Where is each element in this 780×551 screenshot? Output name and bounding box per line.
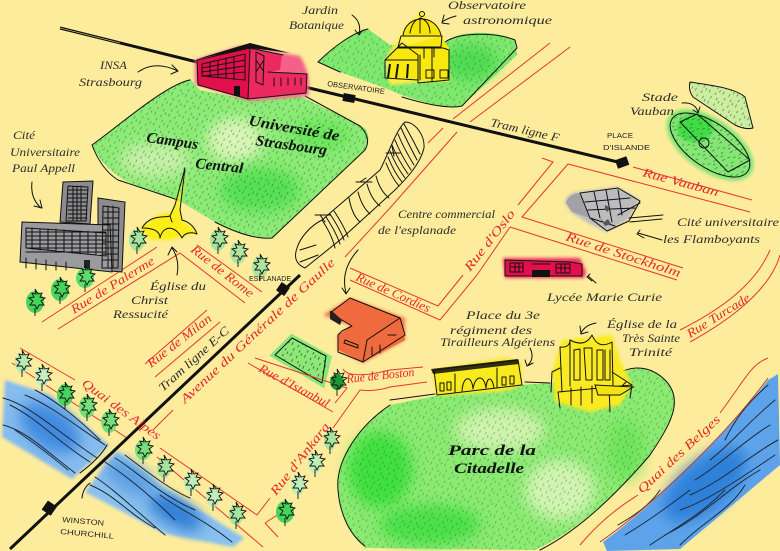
labels: red street names: Rue d'Oslo [461, 207, 518, 275]
labels: red street names: Rue de Cordies [353, 270, 433, 315]
panel: Stade Vauban [654, 82, 766, 195]
labels: black handwriting: de l'esplanade [378, 223, 457, 237]
labels: black handwriting: Paul Appell [11, 161, 76, 175]
icon: Place du 3e RTA yellow building [431, 357, 522, 396]
water: Rhin right [600, 374, 780, 551]
label: Place du 3e RTA: Place du 3e [465, 308, 541, 322]
labels: black handwriting: Central [195, 156, 245, 177]
label: Winston Churchill: WINSTON [62, 515, 104, 528]
icon: INSA building [195, 43, 309, 101]
label: INSA Strasbourg: INSA [99, 58, 128, 72]
panel: Campus Central green area [92, 79, 368, 238]
panel: Parc de la Citadelle green area [338, 368, 674, 550]
labels: red street names: Rue de Stockholm [563, 229, 683, 280]
labels: red street names: Rue de Palerme [67, 254, 157, 317]
labels: red street names: Rue d'Ankara [267, 420, 333, 499]
labels: black handwriting: Universitaire [10, 145, 81, 159]
label: Campus Central: Campus [145, 130, 199, 153]
labels: black handwriting: Strasbourg [254, 133, 328, 159]
labels: black handwriting: D'ISLANDE [603, 143, 650, 152]
labels: black handwriting: Tirailleurs Algériens [440, 335, 555, 349]
labels: red street names: Quai des Alpes [79, 376, 164, 443]
icon: Lycée Marie Curie [503, 258, 586, 278]
labels: black handwriting: CHURCHILL [60, 527, 114, 541]
labels: black handwriting: Très Sainte [622, 331, 681, 345]
labels: red street names: Rue de Milan [143, 311, 214, 371]
icon: Cité universitaire Paul Appell towers [20, 181, 125, 272]
labels: red street names: Rue de Boston [345, 365, 415, 386]
label: Tram ligne E-C: Tram ligne E-C [156, 323, 233, 394]
labels: black handwriting: Christ [131, 293, 169, 307]
icon: Église du Christ Ressuscité [140, 168, 198, 240]
tram line E-C [10, 275, 300, 549]
labels: red street names [67, 165, 753, 499]
water: Ill river left bank [2, 380, 109, 479]
icon: Cité universitaire les Flamboyants [565, 187, 663, 232]
label: Parc de la Citadelle: Parc de la [448, 443, 537, 459]
labels: black handwriting: astronomique [463, 13, 553, 27]
labels: red street names: Quai des Belges [634, 412, 723, 496]
group: trees [15, 227, 347, 529]
label: Place d'Islande: PLACE [607, 131, 633, 140]
icon: tram train [296, 122, 424, 268]
water: Ill river right bank [80, 445, 244, 547]
label: Stade Vauban: Stade [642, 90, 679, 104]
label: Observatoire station: OBSERVATOIRE [327, 79, 385, 96]
labels: black handwriting: les Flamboyants [663, 232, 760, 246]
label: Cité universitaire les Flamboyants: Cité universitaire [677, 215, 780, 229]
label: Église du Christ Ressuscité: Église du [149, 279, 206, 293]
label: Église de la Très Sainte Trinité: Église de la [606, 317, 677, 331]
icon: arrows [32, 15, 700, 366]
labels: black handwriting: Citadelle [454, 461, 524, 477]
icon: observatory [385, 10, 450, 85]
labels: black handwriting: Botanique [289, 18, 345, 32]
tram line F [60, 28, 622, 163]
panel: Jardin botanique green area [318, 29, 517, 107]
icon: Église de la Très Sainte Trinité [551, 335, 633, 412]
icon: centre commercial orange building [323, 298, 405, 363]
labels: black handwriting: Vauban [630, 104, 674, 118]
tram stations [42, 93, 629, 516]
label: Jardin Botanique: Jardin [302, 3, 338, 17]
labels: black handwriting: Strasbourg [79, 75, 142, 89]
labels: red street names: Rue de Rome [187, 242, 257, 300]
labels: black handwriting: régiment des [450, 323, 532, 337]
panel: small square garden [275, 338, 328, 383]
labels: red street names: Rue Turcade [683, 290, 753, 341]
label: Tram ligne F: Tram ligne F [489, 115, 561, 145]
label: Cité universitaire Paul Appell: Cité [13, 128, 36, 142]
labels: red street names: Rue Vauban [640, 165, 720, 199]
labels: red street names: Rue d'Istanbul [256, 361, 333, 411]
labels: black handwriting: Ressucité [112, 307, 169, 321]
labels: red street names: Avenue du Générale de Gaulle [177, 255, 338, 407]
label: Centre commercial de l'esplanade: Centre commercial [398, 207, 496, 221]
label: Lycée Marie Curie: Lycée Marie Curie [546, 290, 663, 304]
label: Université de Strasbourg: Université de [247, 113, 341, 145]
labels: black handwriting: Trinité [629, 345, 673, 359]
label: Esplanade station: ESPLANADE [249, 274, 291, 283]
